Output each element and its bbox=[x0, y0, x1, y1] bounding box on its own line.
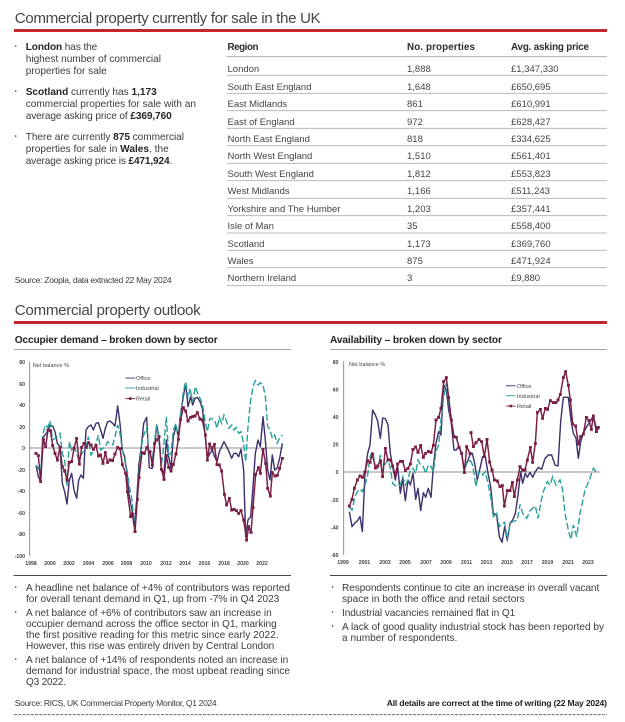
text block: key points for sale: highest number of commercial bbox=[26, 54, 161, 65]
x axis labels: 2006 bbox=[102, 561, 114, 567]
source: RICS: Source: RICS, UK Commercial Property Monitor, Q1 2024 bbox=[15, 698, 217, 708]
x axis labels: 2001 bbox=[359, 560, 370, 566]
y axis labels: -40 bbox=[18, 489, 25, 495]
x axis labels: 2000 bbox=[44, 561, 56, 567]
chart: availability line chart bbox=[331, 360, 600, 566]
x axis labels: 2003 bbox=[379, 560, 391, 566]
subheading: availability: Availability – broken down by sector bbox=[330, 335, 502, 346]
x axis labels: 2014 bbox=[179, 561, 191, 567]
y axis labels: 80 bbox=[333, 360, 339, 366]
text block: occupier demand commentary: Q3 2022. bbox=[26, 677, 66, 688]
axes bbox=[29, 362, 283, 556]
text block: key points for sale: commercial properties for sale with an bbox=[26, 99, 196, 110]
table rows: £628,427 bbox=[511, 117, 551, 128]
table rows: East Midlands bbox=[228, 99, 287, 110]
series: retail bbox=[349, 372, 598, 506]
x axis labels: 2002 bbox=[63, 561, 75, 567]
table header: No. properties bbox=[407, 42, 476, 53]
text block: availability commentary: A lack of good quality industrial stock has been reported by bbox=[342, 622, 605, 633]
chart: occupier demand line chart bbox=[15, 360, 283, 567]
footer note: All details are correct at the time of writing (22 May 2024) bbox=[387, 698, 607, 708]
text block: key points for sale: London has the bbox=[26, 42, 98, 53]
table rows: 818 bbox=[407, 134, 423, 145]
y axis labels: -60 bbox=[331, 553, 339, 559]
table rows: £650,695 bbox=[511, 82, 551, 93]
y axis labels: 20 bbox=[19, 425, 25, 431]
table rows: Northern Ireland bbox=[228, 273, 296, 284]
x axis labels: 2009 bbox=[440, 560, 452, 566]
x axis labels: 2012 bbox=[160, 561, 172, 567]
table rows: £561,401 bbox=[511, 151, 551, 162]
x axis labels: 1999 bbox=[337, 560, 349, 566]
text block: occupier demand commentary: the first positive reading for this metric since early 2022. bbox=[26, 630, 279, 641]
text block: availability commentary bbox=[330, 575, 607, 644]
x axis labels: 2007 bbox=[420, 560, 432, 566]
table rows: 875 bbox=[407, 256, 423, 267]
text block: key points for sale: properties for sale bbox=[26, 66, 107, 77]
table rows: 1,166 bbox=[407, 186, 431, 197]
text block: occupier demand commentary bbox=[14, 575, 291, 688]
y axis labels bbox=[331, 360, 339, 559]
x axis labels: 2018 bbox=[218, 561, 230, 567]
table: commercial property by region bbox=[227, 42, 607, 286]
table rows: £558,400 bbox=[511, 221, 551, 232]
series: office bbox=[36, 383, 282, 537]
source: Zoopla: Source: Zoopla, data extracted 22 May 2024 bbox=[15, 275, 172, 285]
heading: commercial property for sale: Commercial property currently for sale in the UK bbox=[15, 10, 321, 27]
y axis labels: 80 bbox=[19, 360, 25, 366]
axes bbox=[343, 361, 600, 555]
y axis labels: 40 bbox=[333, 415, 339, 421]
text block: key points for sale: average asking price is £471,924. bbox=[26, 156, 172, 167]
heading: commercial property outlook bbox=[14, 302, 607, 324]
table header bbox=[228, 42, 590, 53]
table rows: London bbox=[228, 64, 259, 75]
x axis labels: 2020 bbox=[237, 561, 249, 567]
y axis labels: -40 bbox=[331, 526, 339, 532]
y axis labels: 40 bbox=[19, 403, 25, 409]
x axis labels: 2019 bbox=[542, 560, 553, 566]
x axis labels bbox=[337, 560, 594, 566]
x axis labels: 2017 bbox=[521, 560, 533, 566]
table rows: 1,888 bbox=[407, 64, 431, 75]
series: office bbox=[349, 385, 598, 542]
x axis labels: 2023 bbox=[582, 560, 594, 566]
legend: Industrial bbox=[517, 394, 540, 400]
x axis labels: 2011 bbox=[461, 560, 472, 566]
table rows: £610,991 bbox=[511, 99, 551, 110]
text block: occupier demand commentary: demand for industrial space, the most upbeat reading since bbox=[26, 666, 290, 677]
series: industrial bbox=[36, 381, 282, 527]
legend: Office bbox=[517, 384, 532, 390]
x axis labels: 2016 bbox=[199, 561, 210, 567]
heading: commercial property outlook: Commercial property outlook bbox=[15, 302, 201, 319]
table rows: North West England bbox=[228, 151, 312, 162]
table rows: 1,648 bbox=[407, 82, 431, 93]
text block: key points for sale: Scotland currently has 1,173 bbox=[26, 87, 157, 98]
table rows: West Midlands bbox=[228, 186, 290, 197]
table rows: 3 bbox=[407, 273, 412, 284]
x axis labels: 2021 bbox=[562, 560, 574, 566]
text block: availability commentary: Industrial vacancies remained flat in Q1 bbox=[342, 608, 516, 619]
y axis labels: -80 bbox=[18, 532, 25, 538]
table rows: £553,823 bbox=[511, 169, 551, 180]
text block: availability commentary: Respondents continue to cite an increase in overall vacant bbox=[342, 583, 599, 594]
table rows: South West England bbox=[228, 169, 314, 180]
y axis labels: -60 bbox=[18, 511, 25, 517]
table header: Avg. asking price bbox=[511, 42, 590, 53]
text block: occupier demand commentary: occupier demand across the office sector in Q1, marking bbox=[26, 619, 277, 630]
series: industrial bbox=[349, 383, 598, 540]
table rows: £357,441 bbox=[511, 204, 551, 215]
table rows: £334,625 bbox=[511, 134, 551, 145]
text block: key points for sale: There are currently 875 commercial bbox=[26, 132, 184, 143]
text block: availability commentary: space in both the office and retail sectors bbox=[342, 594, 525, 605]
y axis title: Net balance % bbox=[33, 363, 69, 369]
text block: occupier demand commentary: A net balance of +6% of contributors saw an increase in bbox=[26, 608, 272, 619]
legend: Retail bbox=[517, 404, 531, 410]
text block: key points for sale: properties for sale in Wales, the bbox=[26, 144, 169, 155]
text block: key points for sale: average asking price of £369,760 bbox=[26, 111, 172, 122]
table rows: £369,760 bbox=[511, 239, 551, 250]
y axis labels: 0 bbox=[22, 446, 25, 452]
legend: Industrial bbox=[136, 386, 159, 392]
y axis labels bbox=[15, 360, 25, 560]
table rows: Yorkshire and The Humber bbox=[228, 204, 341, 215]
table rows: 972 bbox=[407, 117, 423, 128]
table rows: 1,203 bbox=[407, 204, 431, 215]
table header: Region bbox=[228, 42, 259, 53]
table rows: £471,924 bbox=[511, 256, 551, 267]
x axis labels: 2022 bbox=[256, 561, 268, 567]
table rows: North East England bbox=[228, 134, 310, 145]
y axis labels: 20 bbox=[333, 442, 339, 448]
table rows bbox=[228, 64, 559, 284]
x axis labels: 2013 bbox=[481, 560, 492, 566]
table rows: South East England bbox=[228, 82, 311, 93]
x axis labels: 2008 bbox=[121, 561, 132, 567]
x axis labels: 2005 bbox=[399, 560, 411, 566]
heading: commercial property for sale bbox=[14, 10, 607, 32]
table rows: Isle of Man bbox=[228, 221, 274, 232]
x axis labels: 2010 bbox=[140, 561, 152, 567]
legend bbox=[125, 376, 159, 403]
y axis labels: -20 bbox=[331, 498, 339, 504]
text block: occupier demand commentary: for overall tenant demand in Q1, up from -7% in Q4 2023 bbox=[26, 594, 280, 605]
x axis labels bbox=[25, 561, 268, 567]
y axis title: Net balance % bbox=[349, 362, 385, 368]
text block: key points for sale bbox=[15, 42, 196, 167]
table rows: 861 bbox=[407, 99, 423, 110]
table rows: 1,173 bbox=[407, 239, 431, 250]
table rows: East of England bbox=[228, 117, 295, 128]
y axis labels: 60 bbox=[333, 388, 339, 394]
text block: availability commentary: a number of respondents. bbox=[342, 633, 457, 644]
y axis labels: 0 bbox=[336, 470, 339, 476]
table rows: £1,347,330 bbox=[511, 64, 559, 75]
table rows: 35 bbox=[407, 221, 418, 232]
table rows: £9,880 bbox=[511, 273, 540, 284]
legend bbox=[506, 384, 540, 410]
table rows: 1,812 bbox=[407, 169, 431, 180]
x axis labels: 2015 bbox=[501, 560, 513, 566]
table rows: 1,510 bbox=[407, 151, 431, 162]
table rows: Wales bbox=[228, 256, 254, 267]
table rows: £511,243 bbox=[511, 186, 550, 197]
text block: occupier demand commentary: A net balance of +14% of respondents noted an increase in bbox=[26, 655, 288, 666]
table rows: Scotland bbox=[228, 239, 264, 250]
y axis labels: 60 bbox=[19, 382, 25, 388]
subheading: occupier demand: Occupier demand – broken down by sector bbox=[15, 335, 218, 346]
y axis labels: -100 bbox=[15, 554, 25, 560]
x axis labels: 1998 bbox=[25, 561, 37, 567]
legend: Office bbox=[136, 376, 151, 382]
y axis labels: -20 bbox=[18, 468, 25, 474]
x axis labels: 2004 bbox=[83, 561, 94, 567]
text block: occupier demand commentary: A headline net balance of +4% of contributors was reported bbox=[26, 583, 290, 594]
text block: occupier demand commentary: However, this rise was entirely driven by Central London bbox=[26, 641, 274, 652]
legend: Retail bbox=[136, 397, 150, 403]
series: retail bbox=[36, 408, 282, 540]
